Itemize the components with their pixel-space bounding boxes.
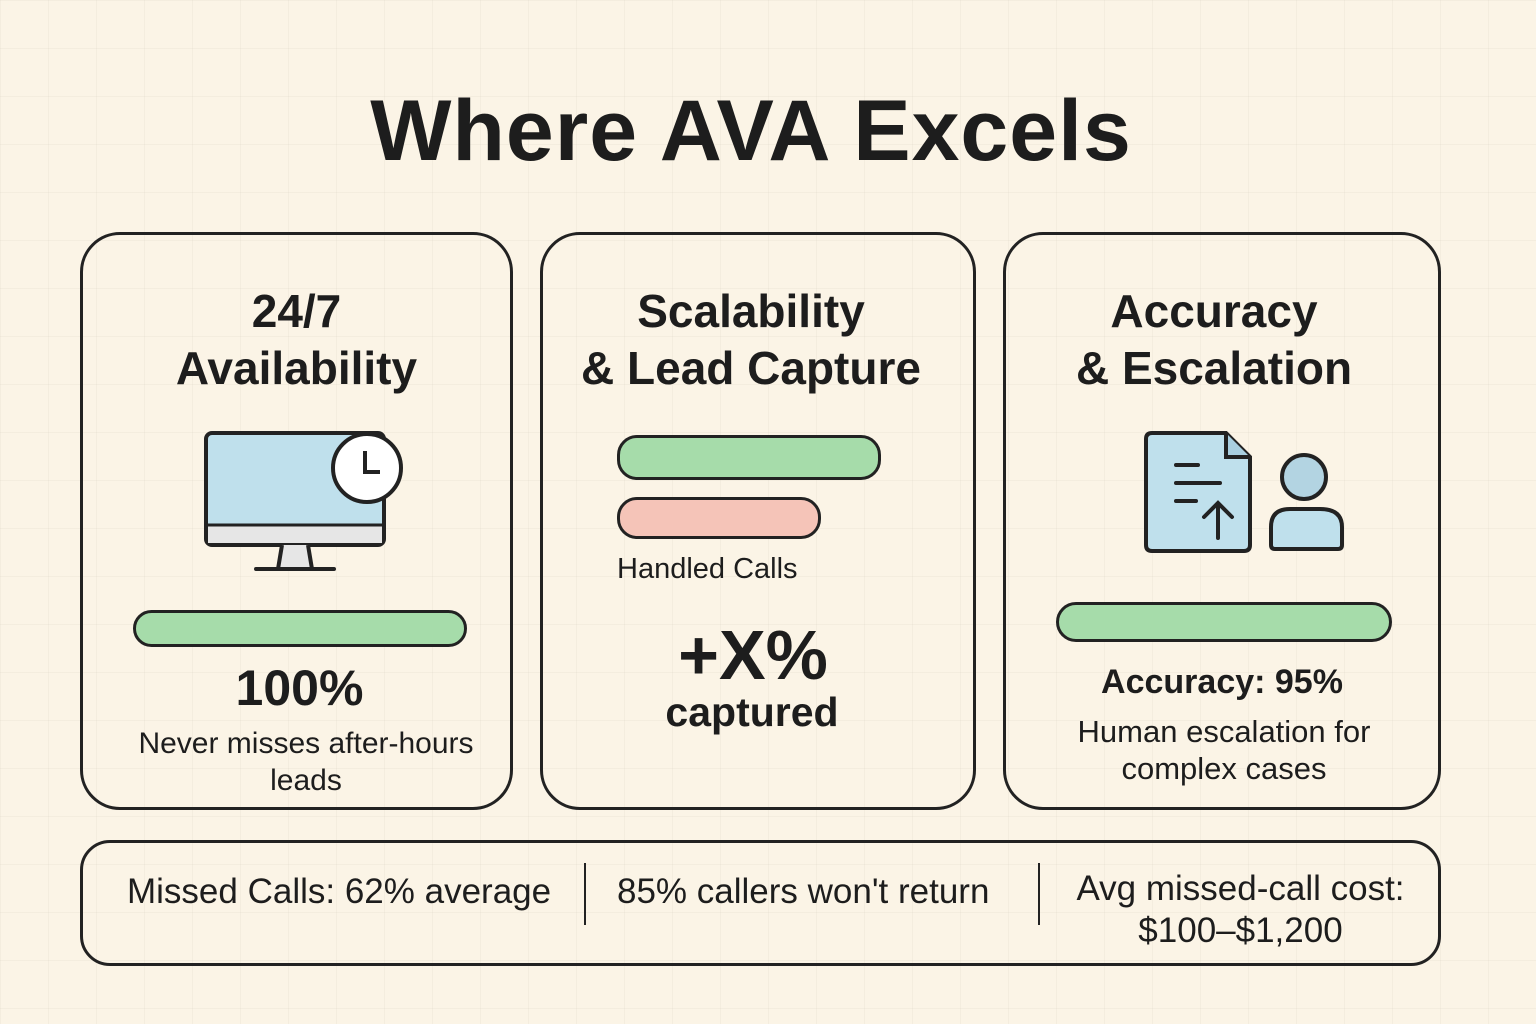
panel: scalability <box>540 232 976 810</box>
heading: & Escalation <box>1076 342 1352 394</box>
stat: cost: $100–$1,200 <box>1138 911 1343 950</box>
stat: Accuracy: 95% <box>1101 663 1343 701</box>
heading: 24/7 <box>252 285 341 337</box>
icon: document and person <box>1144 431 1344 553</box>
heading: Availability <box>176 342 417 394</box>
caption: complex cases <box>1121 751 1327 786</box>
heading: Scalability <box>637 285 865 337</box>
title: Where AVA Excels <box>370 83 1132 179</box>
stat: callers won't return: 85% callers won't return <box>617 872 989 911</box>
panel: accuracy <box>1003 232 1441 810</box>
caption: Human escalation for <box>1078 714 1370 749</box>
panel: scalability: captured <box>665 689 839 735</box>
icon: monitor with clock <box>204 431 403 571</box>
stat: cost <box>1076 869 1405 950</box>
heading <box>176 285 417 394</box>
stat: missed calls: Missed Calls: 62% average <box>127 872 551 911</box>
bar chart <box>617 435 881 585</box>
caption <box>1078 714 1370 786</box>
heading: Accuracy <box>1110 285 1318 337</box>
stat: +X% captured: +X% <box>678 616 828 694</box>
panel: 24/7 availability <box>80 232 513 810</box>
stat: cost: Avg missed-call cost: <box>1076 869 1405 908</box>
caption <box>138 727 474 797</box>
stat: 100%: 100% <box>236 660 363 716</box>
heading: & Lead Capture <box>581 342 921 394</box>
caption: leads <box>270 764 342 797</box>
heading <box>1076 285 1352 394</box>
progress bar <box>1056 602 1392 642</box>
progress bar <box>133 610 467 647</box>
caption: Never misses after-hours <box>138 727 474 760</box>
panel: bottom stats <box>80 840 1441 966</box>
label: Handled Calls <box>617 553 798 585</box>
heading <box>581 285 921 394</box>
